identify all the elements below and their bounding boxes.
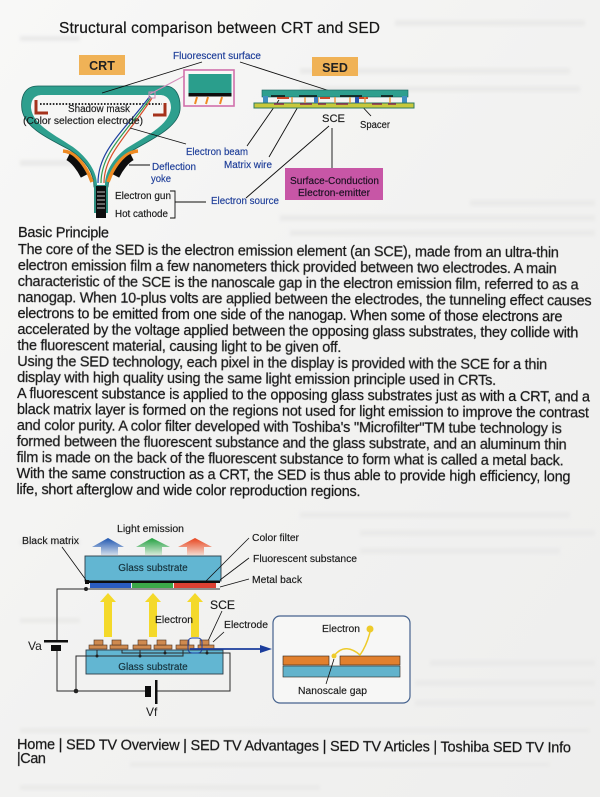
electron gun [94,185,108,218]
circuit wiring [57,589,230,691]
paragraph: fluorescent substance: film is made on the back of the fluorescent substance to form what is called a metal back. [17,450,564,469]
blue callout labels: Fluorescent surface [173,51,262,62]
electrodes [89,640,214,649]
blue callout labels: Electron beam [186,147,248,158]
paragraph: core of the SED: electron emission film a few nanometers thick provided between two electrodes. A main [18,258,557,277]
nanoscale gap detail panel [273,616,410,703]
light emission arrows [92,538,212,555]
CRT labels: (Color selection electrode) [23,116,143,127]
paragraph: core of the SED: The core of the SED is the electron emission element (an SCE), made from an ultra-thin [18,242,559,261]
upper glass substrate [85,556,221,581]
SCE and spacer labels: SCE [322,113,345,125]
Electron and SCE labels: Electrode [224,620,268,631]
paragraph: core of the SED: accelerated by the voltage applied between the opposing glass substrates, they collide with [17,322,578,341]
CRT labels: Electron gun [115,191,171,202]
battery Va [28,639,68,653]
SCE highlight and zoom arrow [188,638,272,653]
leader arrows [102,62,371,198]
paragraph: fluorescent substance [16,386,591,502]
paragraph: core of the SED: characteristic of the SCE is the nanoscale gap in the electron emission film, referred to as a [18,274,580,293]
bracket [170,191,206,218]
paragraph: fluorescent substance: A fluorescent substance is applied to the opposing glass substrates just as with a CRT, and a [17,386,591,406]
upper labels: Black matrix [22,536,79,547]
paragraph: core of the SED: electrons to be emitted from one side of the nanogap. When some of those electrons are [17,306,563,325]
SCE and spacer labels: Spacer [360,120,391,131]
navigation links [17,737,571,770]
upper labels: Fluorescent substance [253,554,358,565]
paragraph: using the SED technology [17,354,547,389]
heading: Basic Principle: Basic Principle [18,225,109,242]
blue callout labels: yoke [151,174,172,185]
wire joints [74,587,208,693]
Electron and SCE labels: Electron [155,615,193,626]
fluorescent surface inset [149,70,234,106]
paragraph: fluorescent substance: life, short afterglow and wide color reproduction regions. [16,482,360,500]
navigation links: |Can [17,751,46,767]
deflection yoke [63,151,138,182]
CRT label: CRT [89,59,115,73]
SCE definition box [285,168,383,200]
Electron and SCE labels: SCE [210,600,235,612]
blue callout labels: Matrix wire [224,160,273,171]
paragraph: core of the SED [17,242,592,358]
leader lines [62,538,249,642]
diagram: structural comparison CRT and SED [22,51,414,220]
color filter and fluorescent layers [85,580,220,588]
lower glass substrate [86,650,223,674]
blue callout labels: Electron source [211,196,280,207]
SCE definition box: Electron-emitter [298,188,371,199]
upper labels [22,533,358,586]
CRT tube [22,86,180,187]
paragraph: fluorescent substance: black matrix layer is formed on the regions not used for light emission to improve the contrast [17,402,589,421]
lower glass substrate: Glass substrate [118,662,188,673]
CRT label [79,55,125,75]
paragraph: fluorescent substance: formed between the fluorescent substance and the glass substrate, and an aluminum thin [17,434,567,453]
paragraph: fluorescent substance: With the same construction as a CRT, the SED is thus able to provide high efficiency, long [17,466,571,485]
battery Vf: Vf [146,705,158,719]
SCE definition box: Surface-Conduction [290,176,379,187]
paragraph: core of the SED: nanogap. When 10-plus volts are applied between the electrodes, the tunneling effect causes [18,290,592,310]
upper labels: Metal back [252,575,302,586]
blue callout labels: Deflection [152,162,196,173]
title: Structural comparison between CRT and SED [59,20,380,37]
nanoscale gap detail panel: Nanoscale gap [298,686,367,697]
CRT labels: Shadow mask [68,104,130,115]
paragraph: fluorescent substance: and color purity. A color filter developed with Toshiba's "Microfilter"TM tube technology is [17,418,562,437]
SED label [312,57,358,76]
upper labels: Color filter [252,533,300,544]
nanoscale gap detail panel: Electron [322,624,360,635]
diagram: SED operating principle [22,524,410,719]
paragraph: core of the SED: the fluorescent material, causing light to be given off. [17,338,341,356]
Electron and SCE labels [155,600,268,631]
navigation links: Home | SED TV Overview | SED TV Advantages | SED TV Articles | Toshiba SED TV Info [17,737,571,756]
body text [16,225,592,502]
electron arrows [100,593,203,637]
paragraph: using the SED technology: Using the SED technology, each pixel in the display is provided with the SCE for a thin [17,354,547,373]
SED label: SED [322,61,348,75]
SED panel cross-section [254,90,414,108]
CRT labels: Hot cathode [115,209,168,220]
light emission label: Light emission [117,524,184,535]
SCE and spacer labels [322,113,391,131]
blue callout labels [151,51,280,207]
battery Va: Va [28,639,42,653]
CRT labels [23,104,171,220]
paragraph: using the SED technology: display with high quality using the same light emission principle used in CRTs. [17,370,496,389]
upper glass substrate: Glass substrate [118,563,188,574]
battery Vf [145,680,158,719]
